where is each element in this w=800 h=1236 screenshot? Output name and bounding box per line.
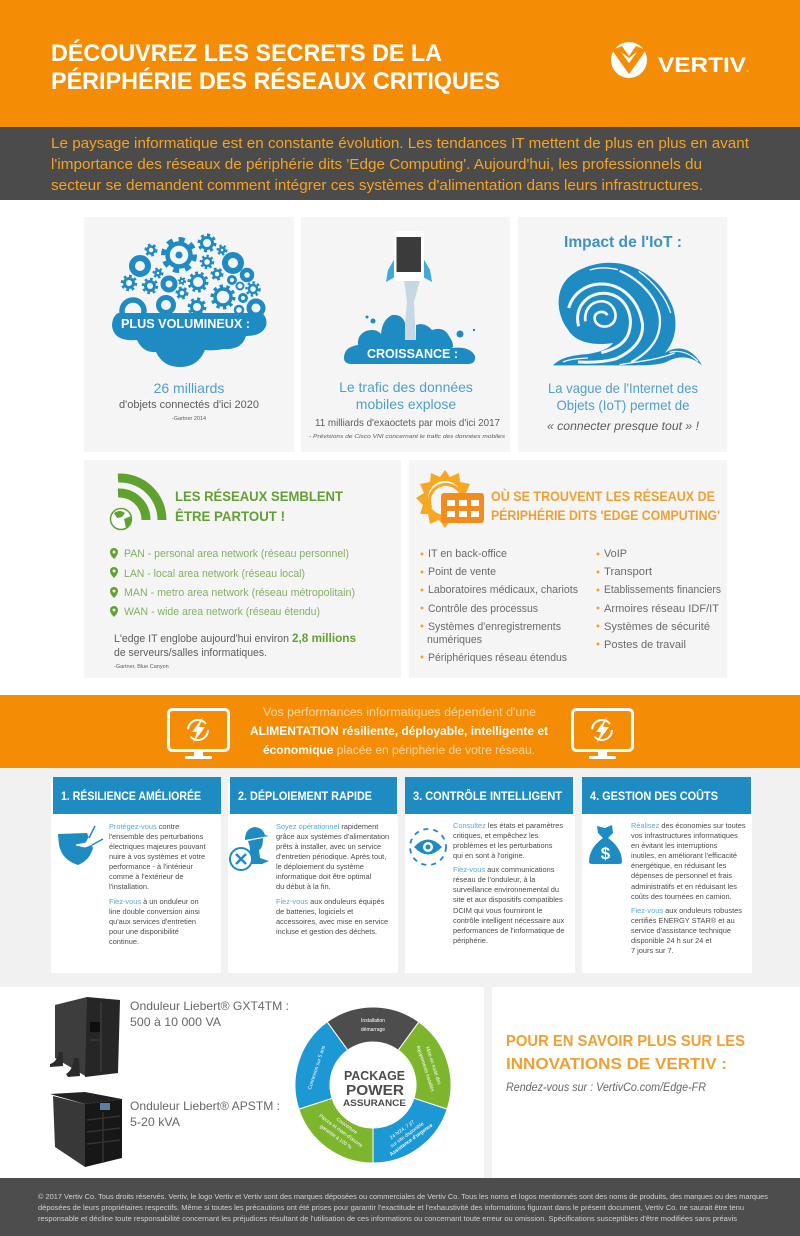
chart: package power assurance ring: 24 h/24, 7 j/7 bbox=[389, 1119, 416, 1141]
network list: WAN - wide area network (réseau étendu) bbox=[124, 606, 320, 618]
text: performance - à l'intérieur bbox=[109, 862, 194, 871]
chart: package power assurance ring: équipements installés bbox=[415, 1045, 435, 1093]
list: left column: IT en back-office bbox=[428, 548, 507, 560]
text: périphérie. bbox=[453, 936, 488, 945]
text: 7 jours sur 7. bbox=[631, 946, 674, 955]
chart: package power assurance ring: Assistance d'urgence bbox=[389, 1123, 434, 1158]
panel: learn more: POUR EN SAVOIR PLUS SUR LES bbox=[506, 1033, 745, 1050]
panel: croissance: Le trafic des données bbox=[339, 379, 473, 395]
text: problèmes et les perturbations bbox=[453, 841, 553, 850]
product: GXT4 UPS bbox=[50, 997, 120, 1077]
text: disponible 24 h sur 24 et bbox=[631, 936, 712, 945]
chart: package power assurance ring: sur site disponible bbox=[389, 1121, 426, 1149]
statistic bbox=[114, 631, 356, 670]
logo: Vertiv: . bbox=[746, 61, 749, 75]
card 3: intelligent control: 3. CONTRÔLE INTELLIGENT bbox=[413, 788, 563, 803]
list: left column: Contrôle des processus bbox=[428, 603, 538, 615]
text: nuire à vos systèmes et votre bbox=[109, 852, 205, 861]
list: left column: Périphériques réseau étendus bbox=[428, 652, 567, 664]
panel: plus volumineux: d'objets connectés d'ici 2020 bbox=[119, 399, 259, 411]
text: surveillance environnemental du bbox=[453, 885, 559, 894]
text: contrôle intelligent nécessaire aux bbox=[453, 916, 565, 925]
card 1: resilience bbox=[51, 777, 221, 973]
panel: croissance: - Prévisions de Cisco VNI concernant le trafic des données mobiles bbox=[309, 434, 505, 440]
chart: package power assurance ring: Pièces et main-d'œuvre bbox=[318, 1113, 364, 1149]
text: prêts à installer, avec un service bbox=[276, 842, 381, 851]
footer: déposées de leurs propriétaires respectifs. Même si toutes les précautions ont été prises pour garantir l'exactitude et l'exhaustivité des informations figurant dans le présent document, Vertiv Co. ne saurait être tenu bbox=[38, 1205, 744, 1212]
panel: impact de l'IoT: La vague de l'Internet des bbox=[548, 380, 698, 396]
text: incluse et gestion des déchets. bbox=[276, 927, 377, 936]
chart: package power assurance ring: Couverture bbox=[335, 1116, 359, 1136]
text: site et aux dispositifs compatibles bbox=[453, 895, 563, 904]
text: le déploiement du système bbox=[276, 862, 364, 871]
text: Protégez-vous contre bbox=[109, 822, 179, 831]
card 2: deployment bbox=[228, 777, 398, 973]
statistic: 2,8 millions bbox=[292, 631, 356, 645]
list: right column: Postes de travail bbox=[604, 639, 686, 651]
ring centre label bbox=[343, 1068, 406, 1109]
icon: money bag: $ bbox=[601, 844, 611, 863]
text: service d'assistance technique bbox=[631, 926, 731, 935]
panel: croissance bbox=[301, 217, 510, 452]
panel: networks everywhere bbox=[84, 460, 401, 678]
list: left column: Systèmes d'enregistrements bbox=[428, 621, 561, 633]
panel: impact de l'IoT: « connecter presque tout » ! bbox=[547, 421, 700, 433]
product: APS UPS bbox=[50, 1092, 122, 1167]
chart: package power assurance ring bbox=[295, 1007, 451, 1163]
icon: eye bbox=[410, 829, 446, 865]
panel: learn more: Rendez-vous sur : VertivCo.com/Edge-FR bbox=[506, 1082, 706, 1094]
text: Vos performances informatiques dépendent d'une bbox=[263, 707, 536, 719]
text: performances de l'informatique de bbox=[453, 926, 565, 935]
text: continue. bbox=[109, 937, 139, 946]
footer: © 2017 Vertiv Co. Tous droits réservés. Vertiv, le logo Vertiv et Vertiv sont des marques déposées ou commerciales de Vertiv Co. Tous les noms et logos mentionnés sont des noms de produits, des marques ou des marques bbox=[38, 1193, 769, 1201]
header band bbox=[0, 0, 800, 127]
list: left column: numériques bbox=[427, 634, 482, 646]
text: Réalisez des économies sur toutes bbox=[631, 821, 746, 830]
text: informatique doit être optimal bbox=[276, 872, 372, 881]
intro band: Le paysage informatique est en constante évolution. Les tendances IT mettent de plus en plus en avant bbox=[51, 136, 749, 152]
chart: package power assurance ring: Mise en route des bbox=[424, 1046, 442, 1086]
logo: Vertiv: VERTIV bbox=[658, 54, 746, 77]
network list bbox=[110, 548, 355, 618]
list: left column bbox=[420, 548, 578, 664]
panel: learn more: INNOVATIONS DE VERTIV : bbox=[506, 1056, 727, 1073]
panel: products: Onduleur Liebert® APSTM : bbox=[130, 1099, 280, 1113]
card 4: cost management bbox=[582, 777, 752, 973]
text bbox=[631, 821, 746, 955]
text: Fiez-vous aux onduleurs robustes bbox=[631, 906, 742, 915]
text: énergétique, en réduisant les bbox=[631, 861, 727, 870]
footer: responsable et décline toute responsabilité concernant les préjudices résultant de l'utilisation de ces informations ou concernant toute erreur ou omission. Spécifications susceptibles d'être modifiées sans préavis bbox=[38, 1216, 738, 1223]
text: vos infrastructures informatiques bbox=[631, 831, 738, 840]
chart: package power assurance ring: démarrage bbox=[361, 1027, 385, 1033]
ring centre label: POWER bbox=[346, 1082, 404, 1099]
icon: wave bbox=[553, 263, 702, 365]
cloud with label bbox=[112, 313, 266, 367]
text: économique placée en périphérie de votre réseau. bbox=[263, 745, 535, 757]
card 4: cost management: 4. GESTION DES COÛTS bbox=[590, 788, 718, 803]
cloud with label: CROISSANCE : bbox=[367, 346, 458, 361]
list: right column: Etablissements financiers bbox=[604, 584, 721, 596]
panel: products: Onduleur Liebert® GXT4TM : bbox=[130, 999, 289, 1013]
panel: croissance: 11 milliards d'exaoctets par mois d'ici 2017 bbox=[315, 417, 500, 429]
text: Fiez-vous aux communications bbox=[453, 865, 555, 874]
text: accessoires, avec mise en service bbox=[276, 917, 388, 926]
chart: package power assurance ring: Installation bbox=[361, 1018, 385, 1024]
text: qu'aux services d'entretien bbox=[109, 917, 196, 926]
text: qui en sont à l'origine. bbox=[453, 851, 525, 860]
network list: LAN - local area network (réseau local) bbox=[124, 568, 305, 580]
panel: impact de l'IoT: Impact de l'IoT : bbox=[564, 234, 682, 251]
panel: edge locations bbox=[409, 460, 727, 678]
icon: gears and cloud bbox=[112, 235, 266, 367]
network list: MAN - metro area network (réseau métropolitain) bbox=[124, 587, 355, 599]
list: left column: Laboratoires médicaux, chariots bbox=[428, 584, 578, 596]
text: Fiez-vous à un onduleur on bbox=[109, 897, 199, 906]
text: Consultez les états et paramètres bbox=[453, 821, 563, 830]
text: line double conversion ainsi bbox=[109, 907, 200, 916]
intro band bbox=[0, 127, 800, 200]
icon: monitor left bbox=[168, 710, 228, 759]
chart: package power assurance ring: garantie à 100 % bbox=[319, 1124, 353, 1151]
panel: learn more bbox=[492, 987, 800, 1178]
icon: money bag bbox=[589, 825, 622, 864]
title bbox=[51, 39, 500, 95]
text: Soyez opérationnel rapidement bbox=[276, 822, 378, 831]
text: en évitant les interruptions bbox=[631, 841, 718, 850]
text bbox=[250, 707, 548, 757]
logo: Vertiv bbox=[611, 42, 749, 78]
text: de batteries, logiciels et bbox=[276, 907, 353, 916]
text: certifiés ENERGY STAR® et au bbox=[631, 916, 735, 925]
card 3: intelligent control bbox=[405, 777, 575, 973]
title: DÉCOUVREZ LES SECRETS DE LA bbox=[51, 39, 442, 67]
panel: products: 5-20 kVA bbox=[130, 1115, 180, 1129]
panel: impact de l'IoT bbox=[518, 217, 727, 452]
text: réseau de l'onduleur, à la bbox=[453, 875, 536, 884]
icon: shield bbox=[58, 826, 103, 865]
text: d'entretien périodique. Après tout, bbox=[276, 852, 386, 861]
heading: ÊTRE PARTOUT ! bbox=[175, 509, 285, 524]
icon: monitor right bbox=[572, 710, 632, 759]
statistic: -Gartner, Blue Canyon bbox=[114, 664, 169, 670]
card 1: resilience: 1. RÉSILIENCE AMÉLIORÉE bbox=[61, 788, 201, 803]
statistic: de serveurs/salles informatiques. bbox=[114, 647, 267, 659]
statistic: L'edge IT englobe aujourd'hui environ bbox=[114, 633, 289, 645]
heading: OÙ SE TROUVENT LES RÉSEAUX DE bbox=[491, 489, 715, 504]
heading bbox=[175, 489, 344, 524]
text bbox=[109, 822, 206, 946]
panel: plus volumineux bbox=[84, 217, 294, 452]
panel: impact de l'IoT: Objets (IoT) permet de bbox=[556, 397, 690, 413]
panel: plus volumineux: -Gartner 2014 bbox=[172, 416, 206, 422]
network list: PAN - personal area network (réseau personnel) bbox=[124, 548, 349, 560]
list: right column: Transport bbox=[604, 566, 652, 578]
footer bbox=[0, 1178, 800, 1236]
text: comme à l'extérieur de bbox=[109, 872, 184, 881]
text: Fiez-vous aux onduleurs équipés bbox=[276, 897, 385, 906]
orange banner bbox=[0, 695, 800, 768]
icon: worker and wrench bbox=[230, 827, 269, 870]
text: électriques majeures pouvant bbox=[109, 842, 206, 851]
panel: products: 500 à 10 000 VA bbox=[130, 1015, 221, 1029]
benefits section background bbox=[0, 768, 800, 1179]
intro band: secteur se demandent comment intégrer ces systèmes d'alimentation dans leurs infrastructures. bbox=[51, 178, 703, 194]
heading bbox=[491, 489, 720, 523]
list: left column: Point de vente bbox=[428, 566, 496, 578]
heading: PÉRIPHÉRIE DITS 'EDGE COMPUTING' bbox=[491, 508, 720, 523]
title: PÉRIPHÉRIE DES RÉSEAUX CRITIQUES bbox=[51, 67, 500, 95]
text: administratifs et en réduisant les bbox=[631, 882, 737, 891]
ring centre label: ASSURANCE bbox=[343, 1098, 406, 1109]
list: right column: Armoires réseau IDF/IT bbox=[604, 603, 719, 615]
text: l'ensemble des perturbations bbox=[109, 832, 204, 841]
card 2: deployment: 2. DÉPLOIEMENT RAPIDE bbox=[238, 788, 372, 803]
ring centre label: PACKAGE bbox=[344, 1068, 405, 1083]
list: right column bbox=[596, 548, 721, 651]
heading: LES RÉSEAUX SEMBLENT bbox=[175, 489, 344, 504]
chart: package power assurance ring: Connexion sur 5 ans bbox=[307, 1044, 327, 1090]
text bbox=[276, 822, 389, 936]
text bbox=[453, 821, 565, 945]
text: critiques, et empêchez les bbox=[453, 831, 539, 840]
list: right column: VoIP bbox=[604, 548, 627, 560]
text: inutiles, en améliorant l'efficacité bbox=[631, 851, 737, 860]
list: right column: Systèmes de sécurité bbox=[604, 621, 710, 633]
text: DCIM qui vous fourniront le bbox=[453, 906, 543, 915]
cloud with label: PLUS VOLUMINEUX : bbox=[121, 316, 250, 331]
text: du début à la fin. bbox=[276, 882, 331, 891]
panel: products bbox=[0, 987, 484, 1178]
text: dépenses de personnel et frais bbox=[631, 871, 732, 880]
intro band: l'importance des réseaux de périphérie dits 'Edge Computing'. Aujourd'hui, les professionnels du bbox=[51, 157, 702, 173]
icon: wifi globe bbox=[110, 478, 162, 530]
panel: plus volumineux: 26 milliards bbox=[154, 380, 224, 396]
text: l'installation. bbox=[109, 882, 149, 891]
panel: croissance: mobiles explose bbox=[356, 396, 456, 412]
icon: phone rocket bbox=[344, 231, 475, 364]
text: coûts des tournées en camion. bbox=[631, 892, 732, 901]
text: pour une disponibilité bbox=[109, 927, 179, 936]
text: ALIMENTATION résiliente, déployable, intelligente et bbox=[250, 726, 548, 738]
text: grâce aux systèmes d'alimentation bbox=[276, 832, 389, 841]
icon: sun and grid bbox=[416, 470, 484, 528]
